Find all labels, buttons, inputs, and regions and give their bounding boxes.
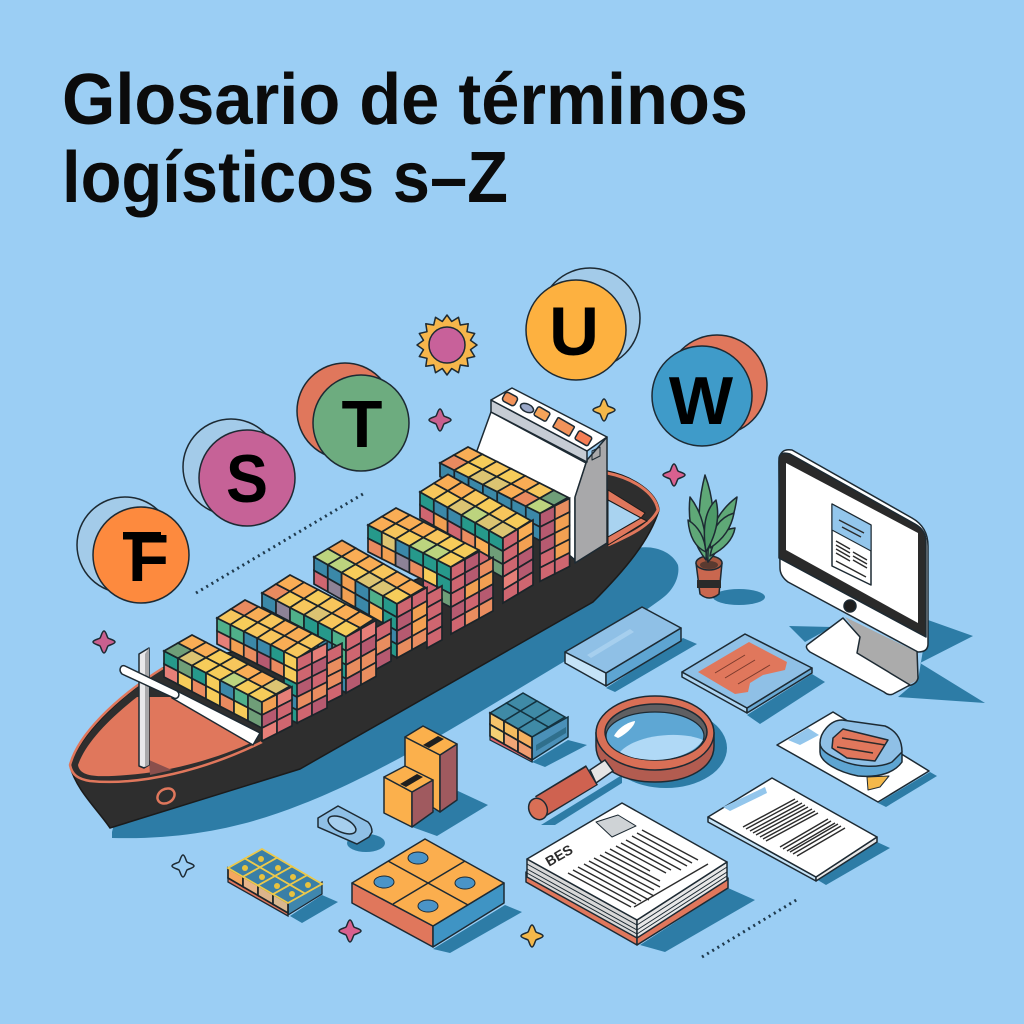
id card with badge [777, 712, 937, 807]
letter circle T [297, 363, 409, 471]
container stack 2 [217, 600, 342, 723]
container stack 5 [420, 474, 533, 603]
stern rim [70, 668, 262, 782]
screen body [779, 450, 928, 652]
computer monitor [779, 450, 928, 695]
mast [120, 648, 179, 775]
container stack 6 [440, 447, 570, 581]
sparkles [93, 399, 685, 947]
camera button [844, 600, 856, 612]
container stack 1 [164, 635, 292, 741]
icon: sun [417, 315, 477, 375]
container stack 3 [314, 540, 442, 665]
fob device [318, 806, 385, 852]
document sheet [708, 778, 890, 885]
bridge superstructure [470, 388, 607, 563]
orange square box [352, 839, 522, 953]
ship shadow [112, 547, 678, 838]
letter circle S: S [226, 441, 268, 517]
stacked book [526, 803, 755, 952]
battery panel [228, 849, 338, 923]
letter circle W: W [669, 363, 734, 439]
title [62, 60, 748, 218]
letter circle F: F [128, 521, 169, 596]
icon: plant [688, 475, 765, 605]
magnifying glass [525, 696, 727, 825]
screen document [832, 504, 871, 585]
cardboard boxes [384, 726, 488, 836]
blue block [565, 607, 697, 692]
letter circle U: U [549, 293, 599, 370]
deck [78, 697, 257, 776]
porthole [155, 785, 177, 807]
deck rail [172, 690, 260, 745]
bow rim and deck [607, 473, 658, 545]
letter circle W [652, 335, 767, 446]
map tablet [682, 634, 825, 724]
container ship [70, 388, 659, 828]
letter circle S [183, 419, 295, 526]
monitor shadow [789, 620, 985, 703]
stacked book: BES [542, 841, 575, 869]
letter circle F [77, 497, 189, 603]
title: Glosario de términos [62, 60, 748, 140]
container stack 4 [368, 508, 493, 634]
hull [70, 471, 659, 828]
dotted line upper [196, 494, 363, 593]
machine block [490, 693, 587, 767]
title: logísticos s–Z [62, 138, 508, 218]
dotted line lower [702, 899, 798, 957]
container stack 2b [262, 575, 391, 693]
stand [806, 617, 918, 695]
letter circle U [526, 268, 640, 380]
letter circle T: T [342, 387, 383, 462]
